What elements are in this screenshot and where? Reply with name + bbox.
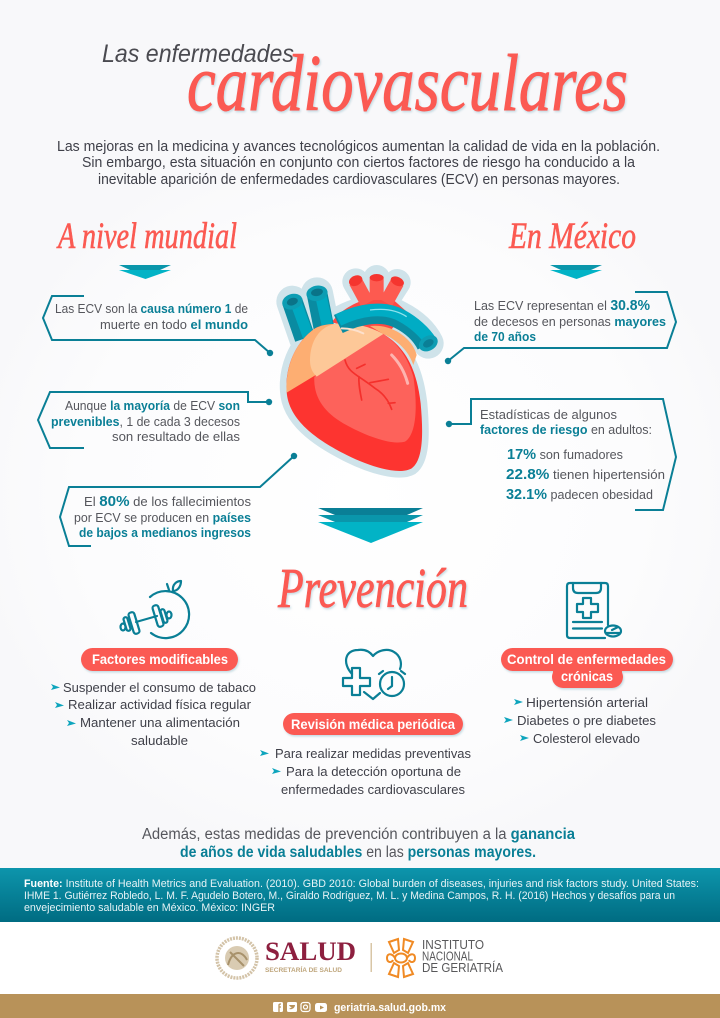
title line 1: Las enfermedades: [102, 40, 294, 68]
website: geriatria.salud.gob.mx: [334, 1002, 447, 1014]
icon: apple with dumbbell: [120, 581, 189, 638]
panel: 30.8%: [445, 292, 676, 364]
panel: factores de riesgo: 22.8% tienen hipertensión: [506, 466, 665, 483]
list: control de enfermedades: Colesterol elevado: [533, 731, 640, 746]
logo band: [0, 922, 720, 994]
intro text: Las mejoras en la medicina y avances tecnológicos aumentan la calidad de vida en la población.: [57, 139, 660, 155]
panel: factores de riesgo: factores de riesgo en adultos:: [480, 422, 652, 437]
panel: 80%: [60, 453, 297, 546]
icon: instagram: [301, 1002, 310, 1012]
logo: SALUD: SALUD: [265, 937, 356, 966]
pill: Control de enfermedades crónicas: [501, 648, 673, 688]
panel: prevenibles: prevenibles, 1 de cada 3 decesos: [51, 414, 240, 429]
icon: facebook: [273, 1002, 283, 1012]
list: control de enfermedades: Hipertensión arterial: [526, 695, 648, 710]
pill: Factores modificables: Factores modificables: [92, 651, 228, 667]
list: control de enfermedades: Diabetes o pre diabetes: [517, 713, 657, 728]
logo: SALUD: SECRETARÍA DE SALUD: [265, 965, 342, 974]
heart halo: [286, 278, 428, 471]
heading: A nivel mundial: A nivel mundial: [56, 216, 237, 257]
coronary veins: [345, 360, 395, 409]
heart inner light area: [314, 334, 416, 443]
intro text: [57, 139, 660, 188]
panel: 30.8%: de decesos en personas mayores: [474, 314, 666, 329]
source band: envejecimiento saludable en México. México: INGER: [24, 902, 275, 914]
panel: factores de riesgo: 17% son fumadores: [507, 446, 623, 463]
heart body: [286, 324, 422, 471]
pill: Factores modificables: [81, 648, 238, 671]
panel: causa número 1: muerte en todo el mundo: [100, 317, 248, 332]
closing statement: de años de vida saludables en las personas mayores.: [180, 844, 536, 861]
panel: 30.8%: Las ECV representan el 30.8%: [474, 298, 650, 314]
heading: En México: En México: [508, 216, 636, 257]
closing statement: [142, 826, 575, 861]
arrow: central chevron: [318, 508, 423, 543]
logo: SALUD: [217, 937, 356, 978]
list: revisión médica: enfermedades cardiovasculares: [281, 782, 465, 797]
list: factores modificables: Suspender el consumo de tabaco: [63, 680, 256, 695]
blue vessels: [280, 284, 329, 338]
intro text: inevitable aparición de enfermedades cardiovasculares (ECV) en personas mayores.: [98, 172, 620, 188]
icon: seal: [217, 938, 257, 978]
panel: causa número 1: Las ECV son la causa número 1 de: [55, 301, 248, 316]
panel: 80%: de bajos a medianos ingresos: [79, 525, 251, 540]
right atrium: [370, 326, 417, 365]
title line 2: cardiovasculares: [187, 40, 628, 128]
list: control de enfermedades: [504, 695, 657, 746]
great vessels, red: [332, 273, 407, 335]
list: revisión médica: Para la detección oportuna de: [286, 764, 461, 779]
panel: prevenibles: Aunque la mayoría de ECV son: [65, 398, 240, 413]
pill: Revisión médica periódica: [283, 713, 463, 735]
panel: 80%: por ECV se producen en países: [74, 510, 251, 525]
icon: INGER symbol: [387, 939, 415, 977]
blue arch: [338, 309, 441, 355]
source band: [0, 868, 720, 922]
icon: heart illustration: [280, 273, 441, 471]
panel: factores de riesgo: [446, 399, 676, 510]
list: factores modificables: [51, 680, 256, 748]
left atrium: [286, 324, 383, 393]
source band: Fuente: Institute of Health Metrics and Evaluation. (2010). GBD 2010: Global burden of diseases, injuries and risk factors study. United States:: [24, 878, 699, 890]
heading: Prevención: Prevención: [277, 558, 468, 620]
logo: Instituto Nacional de Geriatría: INSTITUTO: [422, 937, 484, 952]
list: revisión médica: Para realizar medidas preventivas: [275, 746, 471, 761]
list: revisión médica: [260, 746, 471, 797]
list: factores modificables: saludable: [131, 733, 188, 748]
icon: clipboard with plus and pill: [567, 583, 621, 638]
list: factores modificables: Mantener una alimentación: [80, 715, 240, 730]
highlights: [342, 328, 363, 333]
source band: IHME 1. Gutiérrez Robledo, L. M. F. Agudelo Botero, M., Giraldo Rodríguez, M. L. y Medina Campos, R. H. (2016) Hechos y desafíos para un: [24, 890, 675, 902]
pill: Control de enfermedades crónicas: crónicas: [561, 668, 613, 684]
panel: prevenibles: son resultado de ellas: [112, 429, 240, 444]
pill: Revisión médica periódica: Revisión médica periódica: [291, 716, 455, 732]
logo: Instituto Nacional de Geriatría: [387, 937, 503, 977]
icon: heart with plus and clock: [343, 650, 405, 699]
logo: Instituto Nacional de Geriatría: DE GERIATRÍA: [422, 960, 503, 975]
panel: causa número 1: [43, 296, 273, 356]
arrow: right chevron: [550, 265, 602, 279]
panel: 30.8%: de 70 años: [474, 329, 536, 344]
arrow: left chevron: [119, 265, 171, 279]
list: factores modificables: Realizar actividad física regular: [68, 697, 252, 712]
icon: youtube: [315, 1003, 327, 1012]
intro text: Sin embargo, esta situación en conjunto con ciertos factores de riesgo ha conducido a la: [82, 155, 636, 171]
pill: Control de enfermedades crónicas: Control de enfermedades: [507, 651, 666, 667]
title: [102, 40, 628, 128]
panel: factores de riesgo: 32.1% padecen obesidad: [506, 486, 653, 503]
panel: prevenibles: [38, 392, 272, 448]
panel: 80%: El 80% de los fallecimientos: [84, 493, 252, 510]
panel: factores de riesgo: Estadísticas de algunos: [480, 407, 617, 422]
atrium highlight: [310, 323, 383, 377]
footer band: [0, 994, 720, 1018]
icon: twitter: [287, 1002, 297, 1012]
closing statement: Además, estas medidas de prevención contribuyen a la ganancia: [142, 826, 575, 843]
logo: Instituto Nacional de Geriatría: NACIONAL: [422, 948, 473, 964]
